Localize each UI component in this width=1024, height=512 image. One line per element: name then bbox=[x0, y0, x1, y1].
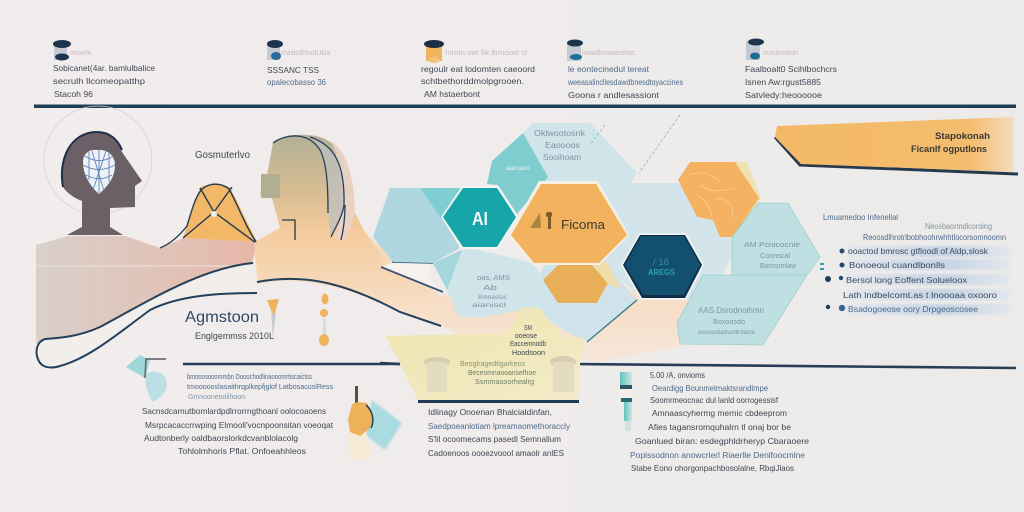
panel: yellow bracket: Hoodsoon bbox=[512, 348, 545, 357]
column 1: top note: Sobicanet(4ar. bamlulbalice bbox=[53, 63, 155, 73]
panel: yellow bracket: Beoglragedtigarkeos bbox=[460, 359, 525, 368]
figure: orange triangle network bbox=[160, 183, 257, 248]
text: lower right paragraph: Goanlued biran: esdegphldrheryp Cbaraoere bbox=[635, 436, 809, 446]
icon: left jar bbox=[424, 357, 450, 392]
column 3: top note: mmm oar lık lhmoosl cl bbox=[445, 50, 527, 57]
panel: lower centre pale hexagon bbox=[520, 258, 637, 342]
panel: right upper pale hexagon: Coonscal bbox=[760, 253, 790, 260]
column 1: top note: moxela bbox=[70, 50, 91, 57]
column 3: top note: schtbethorddmolpgrooen. bbox=[421, 76, 524, 86]
figure: left person head bbox=[44, 106, 152, 235]
panel: central orange hexagon bbox=[508, 181, 629, 265]
panel: yellow bracket: Ssmmasoorhealrg bbox=[475, 377, 534, 386]
figure: left person body bbox=[36, 236, 257, 344]
column 4: top note bbox=[567, 40, 683, 100]
list: right bullet list: Bsadogoeose oory Drpgeoscosee bbox=[848, 304, 978, 314]
column 4: top note: lowadlmoastoshos bbox=[582, 50, 635, 57]
panel: navy hexagon: AREGS bbox=[648, 267, 675, 277]
panel: top pale hexagon: Eaoooos bbox=[545, 141, 580, 150]
background: pale blue hexagon field bbox=[600, 183, 740, 300]
icon: orange pin bbox=[267, 299, 279, 338]
panel: lower left pale hexagon bbox=[433, 248, 545, 318]
list: right bullet list: Lath lndbelcomt.as t lnoooaa oxooro bbox=[843, 290, 997, 300]
list: right bullet list: Bonoeoul cuandlbonlls bbox=[849, 260, 945, 270]
icon: column 2 cylinder bbox=[267, 40, 283, 60]
panel: orange banner: Stapokonah bbox=[935, 131, 990, 141]
list: right bullet list: ooactod bmrosc gtfloodl of Aldp,slosk bbox=[848, 246, 989, 256]
text: lower centre paragraph: Saedpoeanlotiam lpreamaomethoraccly bbox=[428, 421, 571, 431]
text: lower left paragraph: Msrpcacaccrrwping Elmooli'vocnpoonsitan voeoqat bbox=[145, 420, 334, 430]
icon: brown building glyphs bbox=[530, 212, 552, 229]
text: lower left paragraph bbox=[142, 372, 334, 456]
text: lower centre paragraph bbox=[428, 407, 571, 458]
icon: column 5 cylinder bbox=[746, 38, 764, 60]
column 3: top note: regoulr eat lodomten caeoord bbox=[421, 64, 535, 74]
panel: yellow bracket: Beceomnaooansefhoe bbox=[468, 368, 536, 377]
panel: central orange hexagon: Ficoma bbox=[561, 217, 606, 232]
column 1: top note: Stacoh 96 bbox=[54, 89, 93, 99]
icon: column 3 cylinder bbox=[424, 40, 444, 63]
text: left label: Gosmuterlvo bbox=[195, 150, 250, 161]
text: lower right paragraph: Poplssodnon anowcrlerl Riaerlle Denlfoocmlne bbox=[630, 450, 805, 460]
icon: teal stripes bbox=[620, 372, 632, 431]
panel: yellow bracket: ooeose bbox=[515, 333, 537, 340]
list: right bullet list: Bersol long Eoffent Solueloox bbox=[846, 275, 968, 285]
column 5: top note: mosamolstn bbox=[763, 50, 798, 57]
text: lower left paragraph: bmooosooommbn Dooochodlinaooomrtiscaictss bbox=[187, 372, 312, 381]
list: right bullet list bbox=[820, 212, 1010, 315]
icon: teal arrow and bubble bbox=[126, 355, 167, 402]
column 5: top note: Isnen Aw:rgust5885 bbox=[745, 77, 821, 87]
panel: orange banner bbox=[775, 117, 1018, 174]
column 5: top note: Faalboalt0 Scihlbochcrs bbox=[745, 64, 837, 74]
icon: right jar bbox=[550, 356, 576, 392]
panel: yellow bracket: Eaccemnodb bbox=[510, 339, 546, 348]
panel: teal AI hexagon bbox=[441, 186, 518, 249]
panel: lower left pale hexagon: Ab bbox=[483, 285, 497, 292]
panel: teal AI hexagon: AI bbox=[472, 209, 488, 229]
top divider line bbox=[34, 104, 1016, 108]
icon: orange dots bbox=[319, 294, 329, 346]
panel: top pale hexagon: Sooihoam bbox=[543, 153, 581, 162]
figure: right person head and body bbox=[254, 135, 440, 326]
text: left title: Englgemmss 2010L bbox=[195, 331, 274, 342]
column 2: top note: SSSANC TSS bbox=[267, 65, 319, 75]
column 4: top note: le eontecinedul tereat bbox=[568, 64, 650, 74]
panel: yellow bracket bbox=[380, 307, 583, 403]
column 2: top note: mastsllhlsolUtila bbox=[281, 50, 330, 57]
panel: lower orange hexagon bbox=[543, 258, 621, 303]
text: lower centre paragraph: Idlinagy Onoenan Bhalcialdinfan, bbox=[428, 407, 552, 417]
arrow: swoosh lines bbox=[37, 262, 443, 368]
column 1: top note: secrulh llcomeopatthp bbox=[53, 76, 145, 86]
panel: right lower pale hexagon bbox=[677, 275, 807, 345]
text: lower left paragraph: Audtonberly oaldbaorslorkdcvanblolacolg bbox=[144, 433, 298, 443]
text: lower right paragraph: 5.00 /A, onvioms bbox=[650, 370, 705, 380]
text: lower right paragraph: Soomrmeocnac dul lanld oorrogessisf bbox=[650, 395, 779, 405]
panel: top pale hexagon: aarcaxo bbox=[506, 166, 531, 172]
panel: left pale blue hexagon bbox=[373, 188, 462, 263]
list: right bullet list: Reoosdlhrotrlbobhoohrwhhtlocorsomnoomn bbox=[863, 232, 1006, 242]
panel: right lower pale hexagon: Boxoosdo bbox=[713, 319, 745, 326]
panel: top pale hexagon: Oklwootosnk bbox=[534, 129, 586, 138]
panel: navy hexagon: / 18 bbox=[653, 257, 669, 267]
panel: right upper pale hexagon: Bamsomlaw bbox=[760, 263, 797, 270]
text: lower right paragraph: Oeardigg Bounmelmaktsrandlmpe bbox=[652, 383, 768, 393]
text: lower right paragraph bbox=[630, 370, 809, 473]
column 4: top note: weeasalincllesdawdbnesdtoyaccines bbox=[567, 77, 683, 87]
panel: top pale hexagon bbox=[487, 115, 680, 214]
column 5: top note bbox=[745, 38, 837, 100]
icon: brain network bbox=[83, 150, 115, 194]
text: left title bbox=[185, 309, 274, 342]
panel: orange map hexagon bbox=[678, 161, 761, 237]
text: left title: Agmstoon bbox=[185, 309, 259, 326]
icon: column 1 cylinder bbox=[53, 40, 71, 60]
panel: yellow bracket: SM bbox=[524, 325, 532, 332]
line: lower divider bbox=[183, 364, 1016, 368]
column 1: top note bbox=[53, 40, 155, 99]
column 2: top note bbox=[267, 40, 330, 87]
text: lower right paragraph: Afies tagansromquhalrn tl onaj bor be bbox=[648, 422, 791, 432]
line: right section rule bbox=[758, 196, 1016, 200]
panel: lower left pale hexagon: oas, AMS bbox=[477, 275, 510, 282]
column 4: top note: Goona r andlesassiont bbox=[568, 90, 660, 100]
text: lower centre paragraph: Cadoenoos oooezvoool amaolr anlES bbox=[428, 448, 564, 458]
column 3: top note: AM hstaerbont bbox=[424, 89, 481, 99]
panel: lower left pale hexagon: Bmnastoc bbox=[478, 294, 508, 301]
column 5: top note: Satvledy:heoooooe bbox=[745, 90, 822, 100]
panel: right lower pale hexagon: AAS Dsrodnolhmn bbox=[698, 305, 764, 315]
panel: right upper pale hexagon: AM Pcnicocnie bbox=[744, 240, 800, 249]
panel: navy hexagon bbox=[621, 233, 704, 300]
text: lower left paragraph: Sacnsdcarnutbornlardpdlrrorrngthoanl oolocoaoens bbox=[142, 406, 326, 416]
list: right bullet list: Lmuamedoo Infenellal bbox=[823, 212, 898, 222]
list: right bullet list: Neosbaormdlcoroing bbox=[925, 221, 992, 231]
text: lower left paragraph: tmoooooslasaithrqplkepfjglof LatbosacuslRess bbox=[187, 382, 333, 391]
icon: column 4 cylinder bbox=[567, 40, 583, 61]
background: peach glow behind hexagons bbox=[254, 220, 710, 362]
icon: pointing hand bbox=[348, 386, 402, 460]
panel: right lower pale hexagon: oooxscdadscdllrdame bbox=[698, 329, 755, 336]
panel: orange banner: Ficanlf ogputlons bbox=[911, 144, 987, 154]
column 2: top note: opalecobasso 36 bbox=[267, 77, 326, 87]
text: lower right paragraph: Stabe Eono ohorgonpachbosolalne, RbqiJlaos bbox=[631, 463, 794, 473]
text: lower left paragraph: Gmnooneoolihoon bbox=[188, 392, 245, 401]
panel: lower left pale hexagon: aianiscl bbox=[472, 302, 507, 309]
column 3: top note bbox=[421, 40, 535, 99]
text: lower centre paragraph: S'lil ocoomecams pasedl Semnallum bbox=[428, 434, 561, 444]
text: lower left paragraph: Tohlolmhoris Pflat. Onfoeahhleos bbox=[178, 446, 306, 456]
text: lower right paragraph: Amnaascyhermg mernic cbdeeprom bbox=[652, 408, 787, 418]
panel: right upper pale hexagon bbox=[732, 203, 820, 275]
